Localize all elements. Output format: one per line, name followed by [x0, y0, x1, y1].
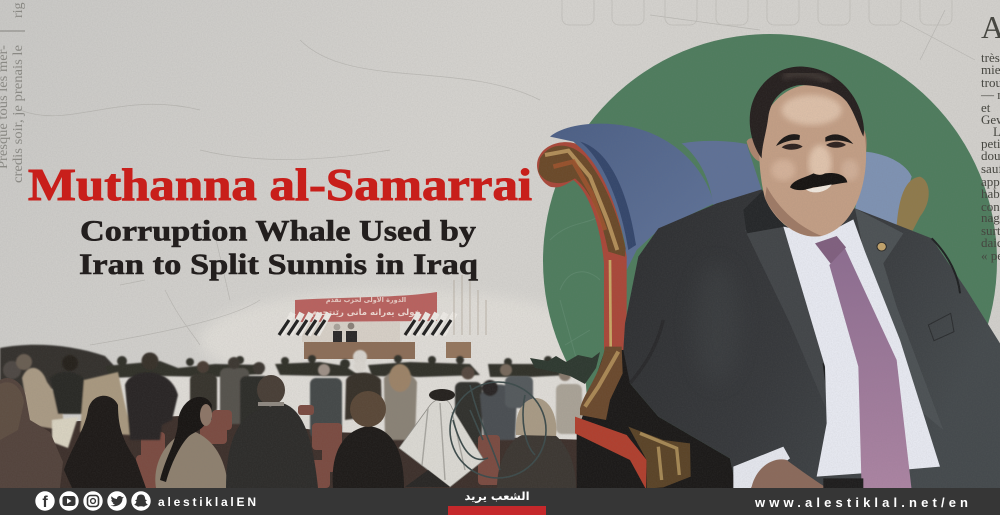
woman in sequin dress: [155, 397, 228, 488]
tie: [815, 236, 912, 490]
suit jacket: [623, 189, 1000, 490]
social handle: alestiklalEN: [158, 495, 256, 509]
footer bar: [0, 488, 1000, 515]
man in armchair: [537, 67, 1000, 490]
teeth smile: [806, 184, 832, 192]
icon: facebook: [35, 491, 55, 511]
podium: [304, 342, 415, 359]
newspaper text, right: con: [981, 199, 1000, 214]
light floor band: [90, 368, 590, 445]
shirt: [783, 219, 940, 477]
curly-haired woman: [333, 391, 404, 488]
woman with long black hair: [64, 396, 146, 488]
hair: [750, 67, 864, 158]
icon: twitter: [107, 491, 127, 511]
chair back: [550, 124, 912, 270]
newspaper text, right: mie: [981, 62, 1000, 77]
rotated newspaper text, left: credis soir, je prenais le: [11, 45, 26, 183]
headscarf woman: [22, 368, 63, 430]
head: [747, 67, 867, 237]
moustache: [790, 173, 847, 190]
cuff and hand: [733, 447, 863, 490]
woman far left: [0, 378, 63, 488]
newspaper text, right: et: [981, 100, 991, 115]
chair carved arm: [537, 142, 929, 490]
foliage at circle base: [530, 352, 600, 384]
newspaper text, right: [980, 9, 1000, 263]
green circle: [543, 34, 997, 488]
newspaper text, right: app: [981, 174, 1000, 189]
eyebrows: [776, 134, 800, 146]
lapel pin: [877, 242, 886, 251]
eyes: [782, 144, 803, 150]
stage with banner, flags and podium: [279, 275, 486, 359]
arabic slogan: الشعب يريد: [464, 489, 530, 503]
mid rows: [190, 350, 582, 444]
newspaper text, right: très: [981, 50, 1000, 65]
icon: snapchat: [131, 491, 151, 511]
rotated newspaper text, left: [0, 2, 26, 183]
speakers: [333, 323, 357, 343]
crowd: [0, 345, 600, 488]
logo stamp circle: [450, 382, 546, 478]
newspaper text, right: dou: [981, 148, 1000, 163]
stage banner: الدورة الأولى لحزب تقدم: [326, 295, 406, 304]
man in suit, centre: [226, 375, 318, 488]
flags: [279, 313, 455, 335]
far crowd heads: [0, 345, 570, 395]
website: www.alestiklal.net/en: [754, 495, 968, 510]
icon: youtube: [59, 491, 79, 511]
scarf woman, right: [497, 398, 576, 488]
red tab: [448, 506, 546, 515]
seats: [136, 405, 500, 488]
newspaper text, right: peti: [981, 136, 1000, 151]
newspaper text, right: surt: [981, 223, 1000, 238]
subtitle: Iran to Split Sunnis in Iraq: [79, 248, 478, 281]
stage banner: خولی یەرانە مانی رێنتجەم: [311, 308, 421, 318]
subtitle: Corruption Whale Used by: [80, 214, 476, 248]
rotated newspaper text, left: rig: [11, 2, 26, 18]
icon: instagram: [83, 491, 103, 511]
newspaper text, right: hab: [981, 186, 1000, 201]
icon: facebook: f: [42, 494, 48, 511]
left back-row people: [3, 352, 178, 448]
base of dark seated rows: [0, 415, 590, 488]
title: name: Muthanna al-Samarrai: [28, 159, 532, 210]
subtitle: [79, 214, 478, 281]
sheikh in white headscarf: [399, 389, 484, 487]
newspaper text, right: nag: [981, 210, 1000, 225]
stage banner: [295, 292, 437, 322]
